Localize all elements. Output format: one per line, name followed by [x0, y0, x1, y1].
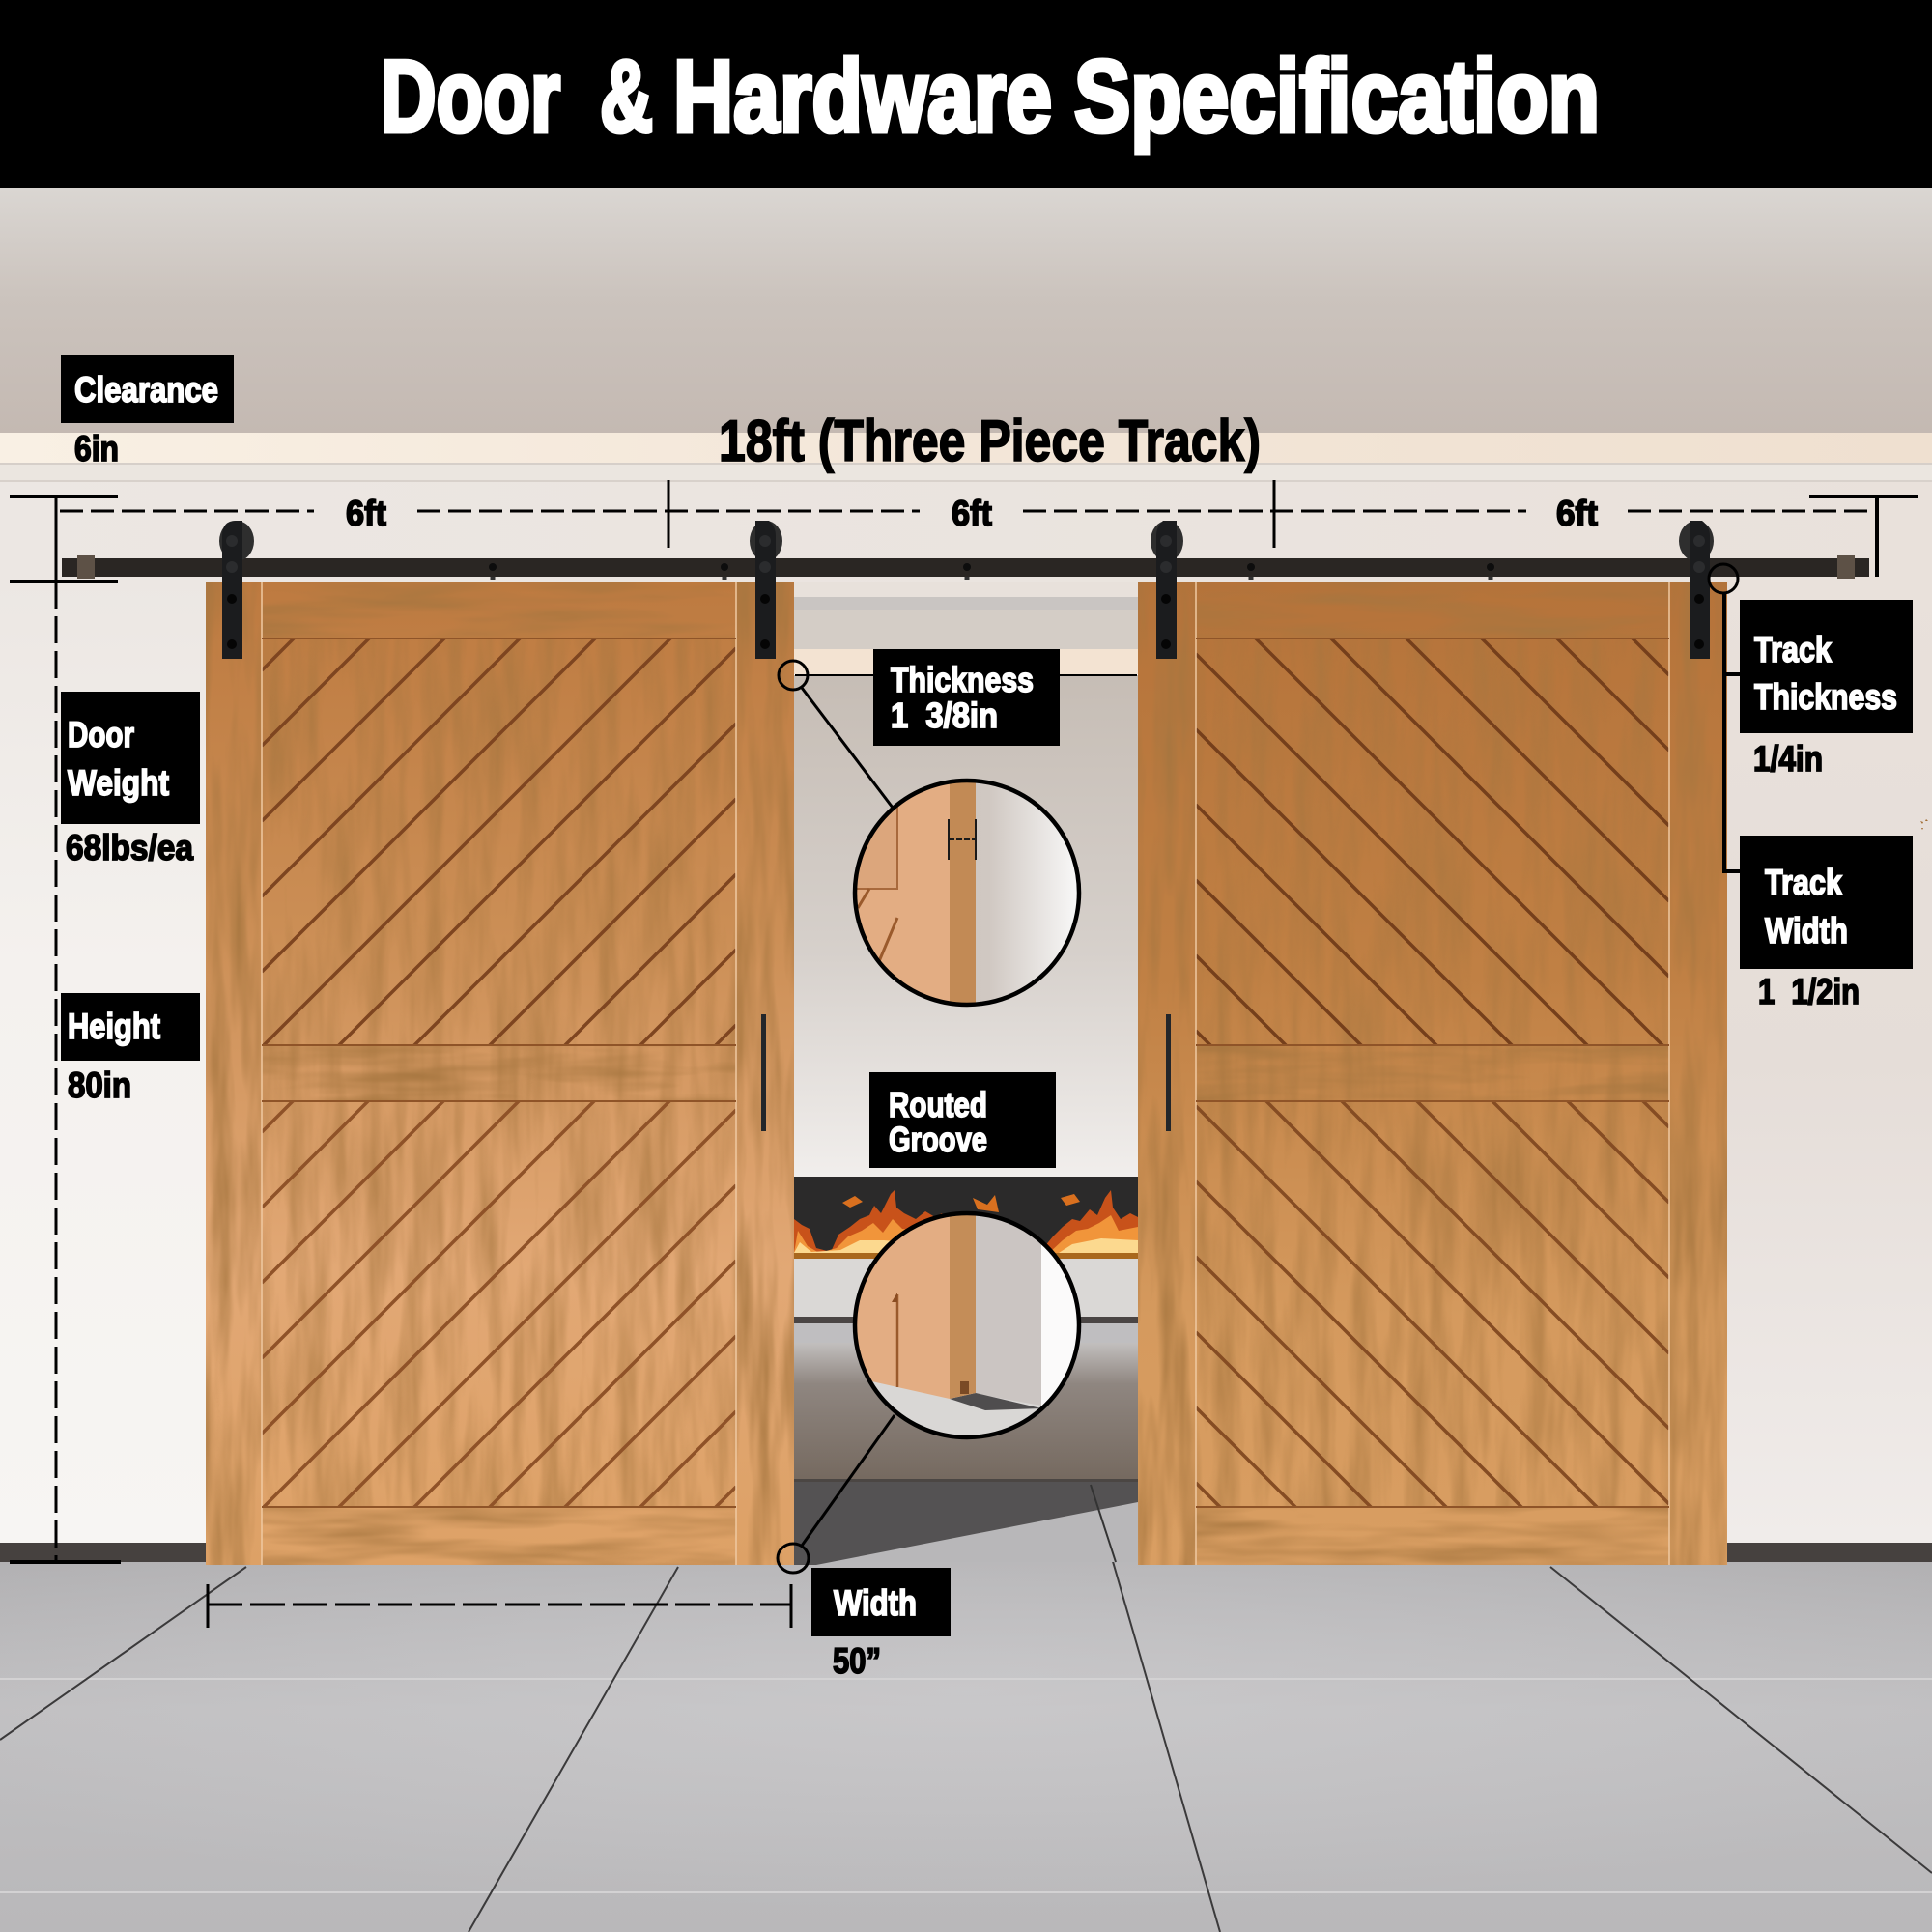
- width callout: Width: [834, 1583, 917, 1623]
- track rail: [62, 555, 1869, 580]
- title: [381, 40, 1600, 154]
- title: Specification: [1074, 40, 1600, 154]
- magnifier: routed groove: [850, 1208, 1082, 1444]
- clearance label: 6in: [74, 429, 119, 469]
- height label: 80in: [68, 1065, 131, 1105]
- door weight label: 68lbs/ea: [66, 828, 193, 867]
- door weight label: [61, 692, 200, 867]
- fireplace band: [794, 1177, 1138, 1317]
- height label: [61, 993, 200, 1105]
- track section dimensions: [60, 480, 1918, 577]
- grooves upper panel: [263, 639, 736, 1044]
- hanger 3: [1151, 521, 1183, 659]
- thickness callout: 1 3/8in: [891, 696, 998, 735]
- hanger 4: [1679, 521, 1714, 659]
- right door: [1138, 582, 1727, 1565]
- door weight label: Door: [68, 715, 134, 754]
- door weight label: Weight: [68, 763, 169, 803]
- height dimension line: [10, 497, 121, 1562]
- handle: [1166, 1014, 1171, 1131]
- track thickness and width callouts: Track: [1765, 863, 1842, 902]
- track length heading: 18ft (Three Piece Track): [719, 409, 1261, 473]
- grooves lower panel: [1196, 1102, 1669, 1506]
- left door: [206, 582, 794, 1565]
- handle: [761, 1014, 766, 1131]
- track section dimensions: 6ft: [952, 494, 992, 533]
- rug: [794, 1343, 1138, 1481]
- routed groove label: [869, 1072, 1056, 1168]
- room background: [0, 188, 1932, 1562]
- hanger 1: [219, 521, 254, 659]
- track thickness and width callouts: 1/4in: [1753, 739, 1823, 779]
- width callout: 50”: [833, 1641, 881, 1681]
- track thickness and width callouts: Thickness: [1754, 677, 1897, 717]
- opening between the doors: [794, 582, 1138, 1565]
- width callout: [208, 1415, 951, 1681]
- title: Hardware: [673, 40, 1052, 154]
- clearance label: Clearance: [74, 370, 218, 410]
- grooves upper panel: [1196, 639, 1669, 1044]
- track section dimensions: 6ft: [346, 494, 386, 533]
- track section dimensions: 6ft: [1556, 494, 1598, 533]
- grooves lower panel: [263, 1102, 736, 1506]
- clearance label: [61, 355, 234, 469]
- routed groove label: Routed: [889, 1085, 987, 1124]
- title: &: [600, 40, 653, 154]
- thickness callout: [779, 649, 1137, 808]
- thickness callout: Thickness: [891, 660, 1034, 699]
- track thickness and width callouts: [1709, 564, 1913, 1011]
- title: Door: [381, 40, 560, 154]
- floor: [0, 1485, 1932, 1932]
- magnifier: door thickness: [850, 773, 1082, 1014]
- header band: [0, 0, 1932, 188]
- routed groove label: Groove: [889, 1120, 987, 1159]
- height label: Height: [68, 1007, 160, 1046]
- track thickness and width callouts: 1 1/2in: [1758, 972, 1860, 1011]
- track thickness and width callouts: Track: [1754, 630, 1832, 669]
- track thickness and width callouts: Width: [1765, 911, 1848, 951]
- hanger 2: [750, 521, 782, 659]
